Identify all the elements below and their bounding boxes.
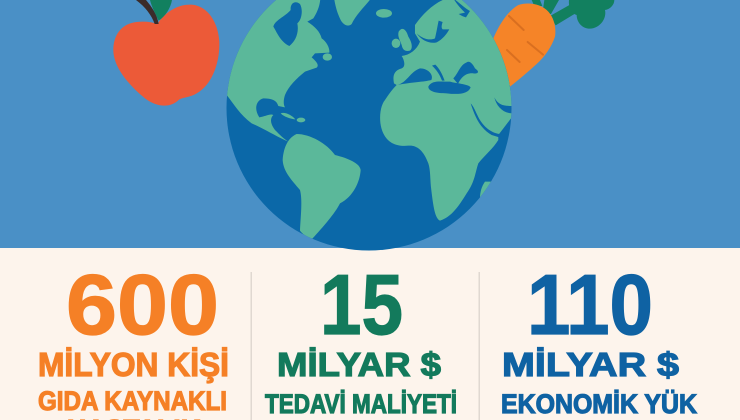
North America xyxy=(220,0,329,142)
Caribbean islands xyxy=(281,113,295,119)
Eurasia and Africa xyxy=(380,0,520,221)
label: million people: MİLYON KİŞİ xyxy=(38,346,229,383)
Newfoundland xyxy=(323,53,332,61)
label: treatment cost: TEDAVİ MALİYETİ xyxy=(265,389,457,419)
divider: right xyxy=(478,272,480,420)
Black Sea and Aegean xyxy=(453,62,478,84)
Red Sea xyxy=(471,103,499,137)
label: billion dollars: MİLYAR $ xyxy=(502,346,679,383)
icon: globe xyxy=(220,0,520,250)
seas over Eurasia and Africa xyxy=(397,0,513,137)
Baltic Sea xyxy=(417,21,449,43)
number 110: 110 xyxy=(527,258,653,353)
western Mediterranean xyxy=(397,68,432,85)
Ireland xyxy=(392,39,400,48)
South America xyxy=(283,134,361,239)
icon: carrot xyxy=(493,0,614,87)
label: foodborne: GIDA KAYNAKLI xyxy=(38,386,227,416)
label: billion dollars: MİLYAR $ xyxy=(277,346,441,383)
label: economic burden: EKONOMİK YÜK xyxy=(501,389,697,419)
stat column: 600 million people xyxy=(38,274,228,420)
Greenland xyxy=(334,0,370,26)
Persian Gulf xyxy=(494,98,512,114)
Britain xyxy=(398,29,412,51)
panel: cream statistics background xyxy=(0,248,740,420)
stat column: 15 billion treatment cost xyxy=(265,258,457,419)
Italy gap xyxy=(432,65,445,81)
eastern Mediterranean xyxy=(428,81,471,94)
panel: blue header background xyxy=(0,0,740,248)
stat column: 110 billion economic burden xyxy=(501,258,697,419)
Arctic inlet xyxy=(453,0,470,17)
Madagascar xyxy=(480,182,491,197)
divider: left xyxy=(250,272,252,420)
number 15: 15 xyxy=(320,258,403,353)
number 600: 600 xyxy=(66,258,219,353)
Iceland xyxy=(376,9,392,18)
icon: apple xyxy=(113,0,219,106)
